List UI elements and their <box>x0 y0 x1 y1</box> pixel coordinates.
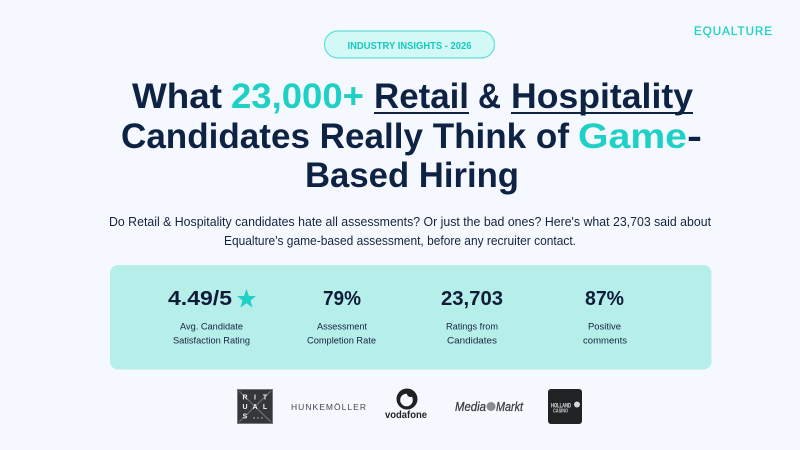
logo: Hunkemoller: HUNKEMÖLLER <box>291 402 366 412</box>
logo: Holland Casino: CASINO <box>553 408 569 414</box>
logo: Rituals: R <box>242 394 248 402</box>
logo: Rituals: I <box>254 394 256 402</box>
stat: completion rate: 79% <box>323 288 361 310</box>
logo: Holland Casino <box>548 389 582 424</box>
title: & <box>478 77 501 116</box>
logo: Vodafone <box>385 388 427 421</box>
logo: Vodafone: vodafone <box>385 409 427 421</box>
stat: positive comments: comments <box>583 336 628 346</box>
logo: Holland Casino: HOLLAND <box>551 404 571 410</box>
logo: Rituals: S <box>243 414 248 420</box>
stat: ratings <box>441 288 503 346</box>
stat: satisfaction rating <box>168 288 256 346</box>
stat: positive comments: 87% <box>585 288 624 310</box>
title: Game <box>578 117 687 156</box>
logo: MediaMarkt: Media <box>455 399 486 414</box>
logo: Rituals: U <box>242 404 248 411</box>
logo: MediaMarkt <box>455 399 524 414</box>
title: Candidates Really Think of <box>121 117 569 156</box>
brand logo: Equalture: EQUALTURE <box>694 26 772 38</box>
stat: satisfaction rating: 4.49/5 <box>168 288 232 310</box>
stat: satisfaction rating: Satisfaction Rating <box>173 336 250 346</box>
panel: key statistics <box>110 265 712 370</box>
logo: Rituals <box>238 390 272 424</box>
logo: Rituals: L <box>263 404 268 411</box>
stat: satisfaction rating: Avg. Candidate <box>180 322 243 332</box>
title: Hospitality <box>511 77 694 116</box>
stat: ratings: Candidates <box>447 336 498 346</box>
icon: star <box>237 289 256 308</box>
title <box>121 77 702 195</box>
subtitle: Do Retail & Hospitality candidates hate all assessments? Or just the bad ones? Here's what 23,703 said about <box>109 214 711 229</box>
title: 23,000+ <box>231 77 364 116</box>
stat: ratings: Ratings from <box>446 322 498 332</box>
title: Based Hiring <box>305 156 519 195</box>
subtitle: Equalture's game-based assessment, before any recruiter contact. <box>224 233 576 248</box>
logo: Rituals: . . . <box>253 414 263 420</box>
title: Retail <box>374 77 469 116</box>
logo: Rituals: A <box>252 404 258 411</box>
title: What <box>132 77 222 116</box>
stat: completion rate: Assessment <box>317 322 367 332</box>
subtitle <box>109 214 711 248</box>
stat: completion rate <box>307 288 376 346</box>
badge: industry insights: INDUSTRY INSIGHTS - 2026 <box>348 40 472 52</box>
stat: positive comments <box>583 288 628 346</box>
stat: positive comments: Positive <box>588 322 621 332</box>
stat: completion rate: Completion Rate <box>307 336 376 346</box>
badge: industry insights <box>324 31 494 58</box>
stat: ratings: 23,703 <box>441 288 503 310</box>
logo: Rituals: T <box>263 394 268 402</box>
logo: MediaMarkt: Markt <box>496 399 524 414</box>
title: - <box>687 117 702 156</box>
